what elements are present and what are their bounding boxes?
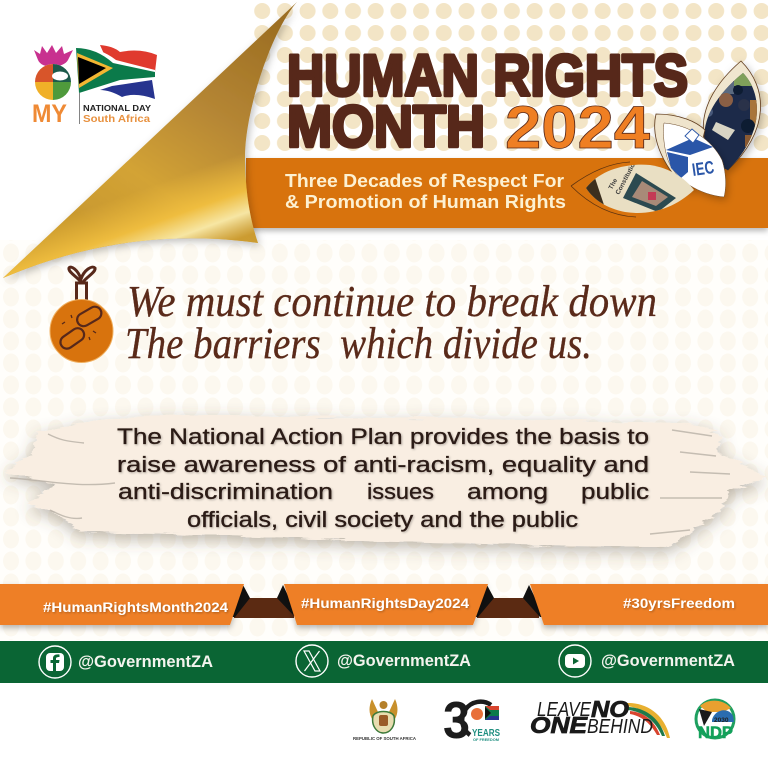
logo: 30 Years of Freedom: OF FREEDOM: [473, 738, 499, 742]
icon: Facebook: [39, 646, 71, 678]
panel: orange subtitle band: [246, 158, 768, 228]
panel: social media bar: [0, 641, 768, 683]
logo: Human Rights emblem MY: MY: [32, 100, 67, 128]
title: [287, 44, 688, 161]
social handles: @GovernmentZA: [337, 652, 471, 670]
heading: handwritten quote: We must continue to break down: [127, 277, 657, 326]
logo: 30 Years of Freedom: 3: [443, 692, 470, 750]
icon: X: [296, 645, 328, 677]
logo: NDP 2030: [696, 700, 734, 742]
text block: National Action Plan: [117, 424, 649, 532]
text block: National Action Plan: anti-discrimination: [118, 479, 333, 504]
icon: leaf IEC ballot box: IEC: [691, 157, 715, 180]
hashtags: #30yrsFreedom: [623, 596, 735, 611]
hashtags: [43, 596, 735, 615]
logo: Republic of South Africa coat of arms: [353, 699, 416, 742]
text block: National Action Plan: The National Action Plan provides the basis to: [117, 424, 649, 449]
ribbon: hashtag banner: [0, 584, 768, 625]
icon: leaf IEC ballot box: [655, 114, 726, 197]
title: MONTH: [287, 94, 485, 160]
subtitle: Three Decades of Respect For: [285, 170, 564, 191]
hashtags: #HumanRightsDay2024: [301, 596, 470, 611]
logo: Republic of South Africa coat of arms: REPUBLIC OF SOUTH AFRICA: [353, 736, 416, 742]
icon: leaf photo crowd: [695, 61, 767, 175]
subtitle: & Promotion of Human Rights: [285, 191, 566, 212]
panel: brush stroke background: [5, 415, 766, 548]
logo: NDP 2030: NDP: [698, 723, 733, 742]
social handles: @GovernmentZA: [78, 653, 213, 671]
logo: Human Rights emblem MY: [32, 45, 73, 128]
subtitle: [285, 170, 566, 212]
logo: Leave No One Behind: [530, 696, 670, 738]
logo: Leave No One Behind: ONE: [530, 712, 588, 738]
logo: 30 Years of Freedom: YEARS: [472, 728, 500, 739]
heading: handwritten quote: [125, 277, 657, 368]
logo: National Day South Africa flag: NATIONAL DAY: [83, 103, 151, 113]
page curl: gold corner: [3, 2, 297, 278]
text block: National Action Plan: officials, civil society and the public: [187, 507, 578, 532]
logo: Leave No One Behind: NO: [591, 696, 629, 722]
icon: hanging tag with broken chain: [50, 267, 113, 362]
icon: YouTube: [559, 645, 591, 677]
social handles: [78, 652, 735, 671]
icon: leaf constitution book: Constitution: [615, 159, 639, 196]
logo: National Day South Africa flag: South Africa: [83, 113, 150, 125]
logo: NDP 2030: 2030: [714, 717, 729, 724]
heading: handwritten quote: The barriers which divide us.: [125, 319, 592, 368]
logo: Leave No One Behind: BEHIND: [587, 716, 653, 738]
social handles: @GovernmentZA: [601, 652, 735, 670]
title: HUMAN RIGHTS: [287, 44, 688, 108]
logo: 30 Years of Freedom: [443, 692, 500, 750]
text block: National Action Plan: among: [467, 479, 548, 504]
text block: National Action Plan: raise awareness of anti-racism, equality and: [117, 452, 649, 477]
title: 2024: [505, 94, 651, 161]
logo: Leave No One Behind: LEAVE: [537, 699, 592, 721]
text block: National Action Plan: public: [581, 479, 649, 504]
hashtags: #HumanRightsMonth2024: [43, 600, 229, 615]
icon: leaf constitution book: The: [608, 177, 619, 191]
logo: National Day South Africa flag: [76, 45, 157, 125]
text block: National Action Plan: issues: [367, 479, 434, 504]
icon: leaf constitution book: [570, 162, 694, 218]
